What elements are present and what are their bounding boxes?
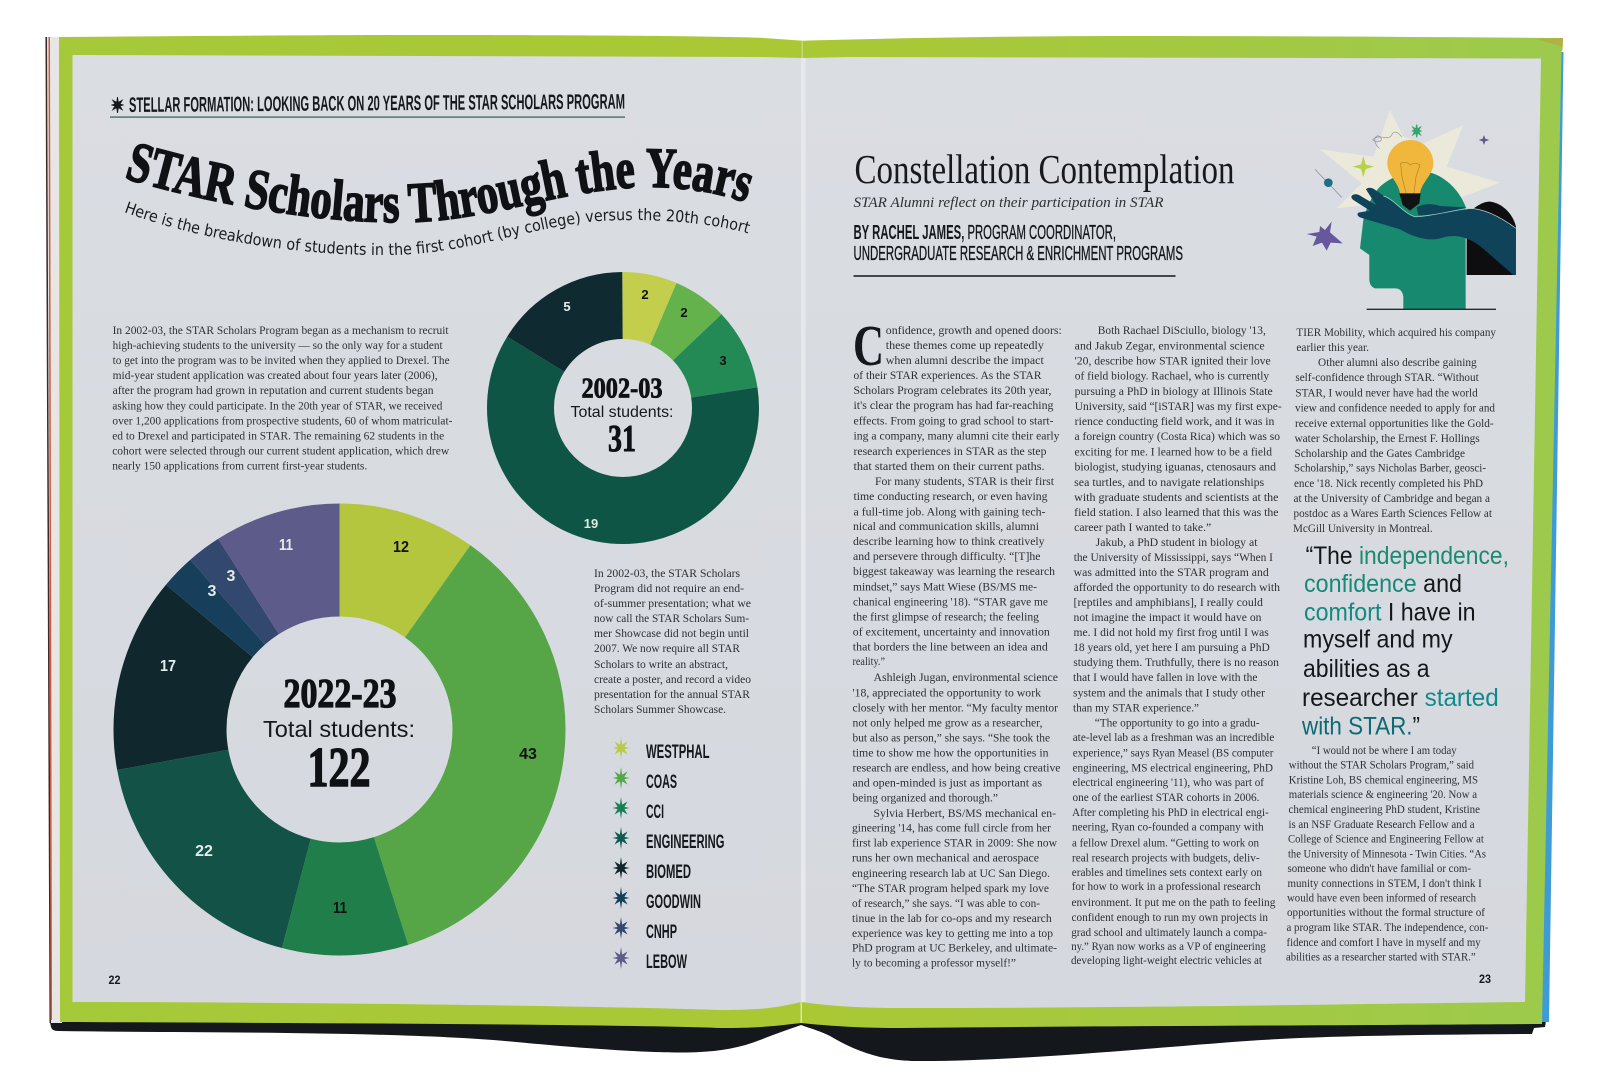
text column 2: rience conducting field work, and it was in [1075, 415, 1275, 428]
text column 2: biologist, studying iguanas, ctenosaurs and [1074, 460, 1276, 474]
text column 1: first lab experience STAR in 2009: She now [852, 836, 1058, 850]
text column 2: Jakub, a PhD student in biology at [1096, 536, 1258, 549]
section header [110, 91, 625, 118]
text block: second paragraph: create a poster, and record a video [594, 673, 751, 686]
legend item: Engineering [612, 827, 724, 853]
text block: intro paragraph [112, 324, 453, 472]
text block: intro paragraph: cohort were selected through our current student application, which drew [112, 444, 450, 458]
text column 2: 18 years old, yet here I am pursuing a PhD [1073, 641, 1270, 654]
text column 1 [852, 313, 1062, 970]
icon: header star [111, 97, 124, 113]
text block: intro paragraph: to get into the program was to be invited when they applied to Drexel. The [113, 354, 450, 367]
text column 3 lower: College of Science and Engineering Fellow at [1288, 832, 1485, 846]
chart: 2002-03 donut [520, 287, 727, 531]
text column 1: reality.” [852, 655, 885, 668]
text column 2 [1071, 324, 1282, 967]
text column 1: a full-time job. Along with gaining tech- [854, 506, 1046, 518]
text block: second paragraph: now call the STAR Scholars Sum- [594, 612, 749, 625]
text column 3 lower [1286, 744, 1489, 963]
page number 22: 22 [108, 975, 120, 987]
text column 1: onfidence, growth and opened doors: [886, 324, 1062, 337]
text column 2: erables and timelines sets context early on [1072, 866, 1262, 879]
text block: intro paragraph: after the program had grown in reputation and current students began [113, 384, 434, 397]
legend item: LeBow [612, 947, 687, 973]
text block: second paragraph: presentation for the annual STAR [594, 688, 750, 701]
text column 2: Both Rachael DiSciullo, biology '13, [1098, 324, 1266, 337]
center label: 2022-23 [284, 670, 396, 716]
text column 1: Scholars Program celebrates its 20th year, [854, 384, 1052, 397]
text column 3 lower: chemical engineering PhD student, Kristine [1288, 803, 1480, 816]
data labels: 43 [519, 746, 537, 763]
data labels [160, 537, 537, 917]
text column 3 upper: postdoc as a Wares Earth Sciences Fellow at [1294, 507, 1493, 520]
text column 2: a foreign country (Costa Rica) which was so [1074, 430, 1280, 443]
text column 2: exciting for me. I learned how to be a field [1074, 446, 1272, 458]
article title: Constellation Contemplation [854, 146, 1234, 192]
text column 2: of field biology. Rachael, who is currently [1075, 370, 1269, 382]
text column 1: time conducting research, or even having [854, 490, 1048, 503]
text column 2: developing light-weight electric vehicles at [1071, 954, 1263, 967]
legend item: Goodwin [612, 887, 701, 913]
legend item: COAS [612, 767, 677, 793]
panel: right page [800, 41, 1541, 1023]
chart: 2022-23 donut [160, 537, 537, 917]
text column 2: sea turtles, and to navigate relationships [1074, 476, 1265, 489]
text column 2: engineering, MS electrical engineering, PhD [1072, 762, 1273, 774]
text block: second paragraph: Program did not require an end- [594, 582, 744, 595]
center label: 31 [608, 418, 636, 460]
text column 1: runs her own mechanical and aerospace [852, 852, 1039, 864]
text column 1: ing a company, many alumni cite their early [854, 430, 1060, 442]
text column 3 upper: TIER Mobility, which acquired his company [1296, 326, 1496, 339]
icon: head with light bulb illustration [1307, 110, 1516, 310]
text column 2: electrical engineering '11), who was part of [1072, 776, 1264, 789]
text column 1: tinue in the lab for co-ops and my research [852, 912, 1052, 925]
text column 1: when alumni describe the impact [886, 354, 1045, 367]
text column 2: field station. I also learned that this was the [1074, 506, 1278, 519]
text column 1: Ashleigh Jugan, environmental science [874, 671, 1058, 684]
text column 2: was admitted into the STAR program and [1074, 566, 1269, 579]
text column 3 upper: Other alumni also describe gaining [1318, 356, 1477, 369]
text column 3 lower: opportunities without the formal structure of [1287, 906, 1485, 919]
text column 3 lower: is an NSF Graduate Research Fellow and a [1288, 818, 1474, 831]
text column 2: me. I did not hold my first frog until I was [1074, 626, 1269, 639]
text column 1: being organized and thorough.” [852, 792, 998, 804]
text column 2: one of the earliest STAR cohorts in 2006. [1072, 791, 1260, 804]
text column 3 lower: fidence and comfort I have in myself and my [1286, 936, 1481, 949]
text column 3 lower: a program like STAR. The independence, con- [1286, 921, 1489, 934]
text column 3 upper: view and confidence needed to apply for and [1295, 402, 1495, 415]
pull quote: myself and my [1303, 626, 1453, 654]
title: STAR Scholars Through the Years [126, 144, 752, 224]
legend item: COAS: COAS [646, 772, 677, 793]
byline [854, 222, 1183, 265]
text column 2: that I would have fallen in love with the [1073, 671, 1258, 684]
text column 1: closely with her mentor. “My faculty mentor [852, 702, 1058, 714]
text column 3 lower: Kristine Loh, BS chemical engineering, MS [1289, 774, 1478, 786]
panel: left page [72, 55, 838, 1010]
back hair [1467, 202, 1516, 275]
byline: BY RACHEL JAMES, PROGRAM COORDINATOR, [854, 222, 1116, 244]
data labels [563, 287, 727, 531]
text column 1: and persevere through difficulty. “[T]he [853, 550, 1040, 563]
text block: second paragraph: 2007. We now require all STAR [594, 642, 740, 655]
pull quote: comfort I have in [1304, 598, 1476, 626]
data labels: 19 [584, 516, 598, 531]
text column 1: research are endless, and how being creative [852, 762, 1060, 774]
text block: second paragraph: Scholars Summer Showcase. [594, 703, 726, 716]
data labels: 2 [680, 305, 688, 320]
data labels: 3 [719, 353, 727, 368]
text column 3 upper: Scholarship,” says Nicholas Barber, geosci- [1294, 462, 1486, 475]
text column 2: real research projects with budgets, deliv- [1072, 852, 1260, 864]
text column 1: these themes come up repeatedly [886, 339, 1044, 352]
data labels: 3 [208, 583, 217, 600]
text block: intro paragraph: ed to Drexel and participated in STAR. The remaining 62 students in the [112, 430, 444, 442]
text column 2: [reptiles and amphibians], I really could [1074, 596, 1263, 609]
text column 3 upper: self-confidence through STAR. “Without [1295, 371, 1479, 384]
hand [1351, 188, 1516, 275]
drop cap: C [853, 313, 884, 378]
text column 1: biggest takeaway was learning the research [853, 565, 1055, 578]
text column 1: it's clear the program has had far-reaching [854, 399, 1054, 412]
text column 2: confident enough to run my own projects in [1072, 911, 1268, 924]
text column 2: than my STAR experience.” [1073, 702, 1199, 714]
legend item: Biomed [612, 857, 691, 883]
text column 2: afforded the opportunity to do research with [1074, 581, 1280, 594]
text column 3 upper: ence '18. Nick recently completed his PhD [1294, 477, 1483, 490]
text column 1: PhD program at UC Berkeley, and ultimate- [852, 942, 1057, 954]
text column 3 upper: water Scholarship, the Ernest F. Hollings [1294, 432, 1480, 445]
text column 3 lower: the University of Minnesota - Twin Cities. “As [1288, 848, 1486, 860]
text column 2: pursuing a PhD in biology at Illinois State [1075, 385, 1273, 398]
center label: Total students: [570, 404, 674, 421]
subtitle: Here is the breakdown of students in the first cohort (by college) versus the 20th cohort [125, 202, 750, 255]
text column 2: and Jakub Zegar, environmental science [1075, 340, 1265, 352]
text column 3 lower: would have even been informed of research [1287, 892, 1476, 904]
text column 2: '20, describe how STAR ignited their love [1075, 354, 1271, 368]
text column 3 lower: munity connections in STEM, I don't think I [1288, 877, 1482, 890]
text column 1: '18, appreciated the opportunity to work [852, 686, 1041, 700]
text column 3 lower: abilities as a researcher started with STAR.” [1286, 950, 1476, 963]
text block: intro paragraph: over 1,200 applications from prospective students, 60 of whom matriculat- [112, 414, 453, 428]
text block: intro paragraph: mid-year student application was created about four years later (2006), [113, 369, 438, 382]
text column 1: of excitement, uncertainty and innovation [853, 626, 1050, 638]
data labels: 12 [393, 539, 409, 556]
text column 2: not imagine the impact it would have on [1074, 611, 1262, 624]
text column 3 upper: McGill University in Montreal. [1293, 522, 1433, 535]
text column 1: engineering research lab at UC San Diego. [852, 867, 1050, 880]
text column 3 upper: earlier this year. [1296, 341, 1369, 354]
legend item: Westphal [612, 737, 710, 763]
text column 2: University, said “[iSTAR] was my first expe- [1075, 400, 1282, 413]
text column 1: time to show me how the opportunities in [852, 746, 1049, 760]
text column 1: ly to becoming a professor myself!” [852, 956, 1016, 970]
text block: second paragraph: of-summer presentation; what we [594, 597, 751, 610]
corner wear [1535, 38, 1563, 50]
text block: second paragraph: In 2002-03, the STAR Scholars [594, 567, 740, 580]
text column 2: neering, Ryan co-founded a company with [1072, 820, 1264, 834]
burst [1320, 110, 1500, 208]
page number 23: 23 [1479, 974, 1491, 986]
byline: UNDERGRADUATE RESEARCH & ENRICHMENT PROGRAMS [854, 243, 1183, 265]
data labels: 17 [160, 658, 176, 675]
text column 1: mindset,” says Matt Wiese (BS/MS me- [853, 580, 1037, 594]
text column 2: experience,” says Ryan Measel (BS computer [1073, 746, 1274, 760]
center label [263, 670, 415, 799]
legend [612, 737, 724, 973]
center label: Total students: [263, 716, 415, 742]
text block: intro paragraph: nearly 150 applications from current first-year students. [112, 460, 367, 472]
pull quote: researcher started [1302, 684, 1499, 712]
text column 3 lower: materials science & engineering '20. Now a [1289, 788, 1477, 801]
text column 2: with graduate students and scientists at the [1074, 491, 1278, 504]
data labels: 11 [333, 900, 347, 917]
text column 2: for how to work in a professional research [1072, 880, 1261, 893]
text column 2: studying them. Truthfully, there is no reason [1073, 656, 1279, 669]
text block: second paragraph [594, 567, 751, 716]
light bulb [1387, 140, 1433, 211]
center label: 2002-03 [582, 374, 662, 404]
spine [801, 58, 806, 1002]
text column 1: describe learning how to think creatively [853, 535, 1045, 548]
text column 1: For many students, STAR is their first [875, 475, 1055, 488]
left page edge strips [45, 37, 62, 1023]
text column 2: a fellow Drexel alum. “Getting to work on [1072, 836, 1259, 850]
legend item: Biomed: BIOMED [646, 862, 691, 883]
text column 1: Sylvia Herbert, BS/MS mechanical en- [874, 807, 1056, 820]
text column 1: gineering '14, has come full circle from her [852, 822, 1051, 834]
book underside shadow [50, 1021, 1546, 1061]
text column 1: that borders the line between an idea and [853, 640, 1048, 654]
text column 3 lower: someone who didn't have familial or com- [1288, 862, 1471, 875]
text column 3 upper: at the University of Cambridge and began a [1294, 492, 1490, 505]
text column 2: career path I wanted to take.” [1074, 521, 1211, 534]
pull quote: confidence and [1304, 570, 1462, 598]
header rule [110, 116, 625, 118]
text column 1: of research,” she says. “I was able to con- [852, 897, 1040, 910]
text block: intro paragraph: high-achieving students to the university — so the only way for a student [113, 339, 443, 352]
text column 2: ate-level lab as a freshman was an incredible [1073, 731, 1274, 744]
text block: second paragraph: mer Showcase did not begin until [594, 627, 749, 640]
legend item: Westphal: WESTPHAL [646, 742, 710, 763]
legend item: CNHP: CNHP [646, 922, 677, 943]
header text: STELLAR FORMATION: LOOKING BACK ON 20 YEARS OF THE STAR SCHOLARS PROGRAM [129, 91, 625, 117]
text column 2: grad school and ultimately launch a compa- [1071, 926, 1267, 939]
text column 2: the University of Mississippi, says “When I [1074, 551, 1273, 564]
text block: intro paragraph: In 2002-03, the STAR Scholars Program began as a mechanism to recruit [113, 324, 449, 337]
legend item: CNHP [612, 917, 677, 943]
text column 1: experience was key to getting me into a top [852, 927, 1053, 940]
center label: 122 [308, 737, 370, 799]
byline rule [854, 275, 1176, 277]
text column 1: research experiences in STAR as the step [854, 445, 1047, 458]
text column 3 lower: without the STAR Scholars Program,” said [1289, 758, 1474, 772]
text column 2: After completing his PhD in electrical engi- [1072, 806, 1269, 819]
text column 2: environment. It put me on the path to feeling [1072, 896, 1276, 909]
text column 1: chanical engineering '18). “STAR gave me [853, 596, 1048, 608]
text block: second paragraph: Scholars to write an abstract, [594, 658, 728, 671]
pull quote: abilities as a [1303, 655, 1430, 683]
text column 1: but also as person,” she says. “She took the [852, 732, 1050, 744]
pull quote: “The independence, [1306, 542, 1509, 570]
data labels: 22 [195, 843, 213, 860]
legend item: CCI: CCI [646, 802, 664, 823]
text column 1: effects. From going to grad school to start- [854, 414, 1054, 428]
text column 2: system and the animals that I study other [1073, 686, 1265, 700]
text column 3 lower: “I would not be where I am today [1312, 744, 1457, 757]
pull quote: with STAR.” [1301, 712, 1420, 740]
text column 3 upper: receive external opportunities like the Gold- [1295, 417, 1494, 430]
legend item: Goodwin: GOODWIN [646, 892, 701, 913]
text column 3 upper: Scholarship and the Gates Cambridge [1294, 447, 1465, 460]
text column 3 upper: STAR, I would never have had the world [1295, 386, 1478, 399]
legend item: LeBow: LEBOW [646, 952, 687, 973]
stars and orbit [1307, 125, 1489, 251]
head [1360, 172, 1466, 309]
pull quote [1301, 542, 1509, 740]
text column 3 upper [1293, 326, 1496, 535]
right page edge strip [1535, 52, 1564, 1022]
data labels: 11 [279, 537, 293, 554]
text block: intro paragraph: asking how they could participate. In the 20th year of STAR, we received [112, 400, 443, 412]
center label [570, 374, 674, 460]
text column 2: ny.” Ryan now works as a VP of engineering [1071, 940, 1266, 953]
text column 1: not only helped me grow as a researcher, [852, 716, 1043, 730]
legend item: Engineering: ENGINEERING [646, 832, 724, 853]
text column 1: that started them on their current paths. [854, 460, 1045, 473]
text column 2: “The opportunity to go into a gradu- [1095, 716, 1260, 730]
text column 1: the first glimpse of research; the feeling [853, 610, 1039, 624]
base line [1367, 309, 1496, 310]
text column 1: and open-minded is just as important as [852, 776, 1042, 790]
text column 1: “The STAR program helped spark my love [852, 882, 1049, 895]
data labels: 3 [227, 568, 236, 585]
data labels: 2 [641, 287, 649, 302]
text column 1: of their STAR experiences. As the STAR [854, 369, 1042, 382]
legend item: CCI [612, 797, 664, 823]
article subtitle: STAR Alumni reflect on their participation in STAR [854, 195, 1164, 211]
data labels: 5 [563, 299, 571, 314]
text column 1: nical and communication skills, alumni [853, 520, 1039, 533]
